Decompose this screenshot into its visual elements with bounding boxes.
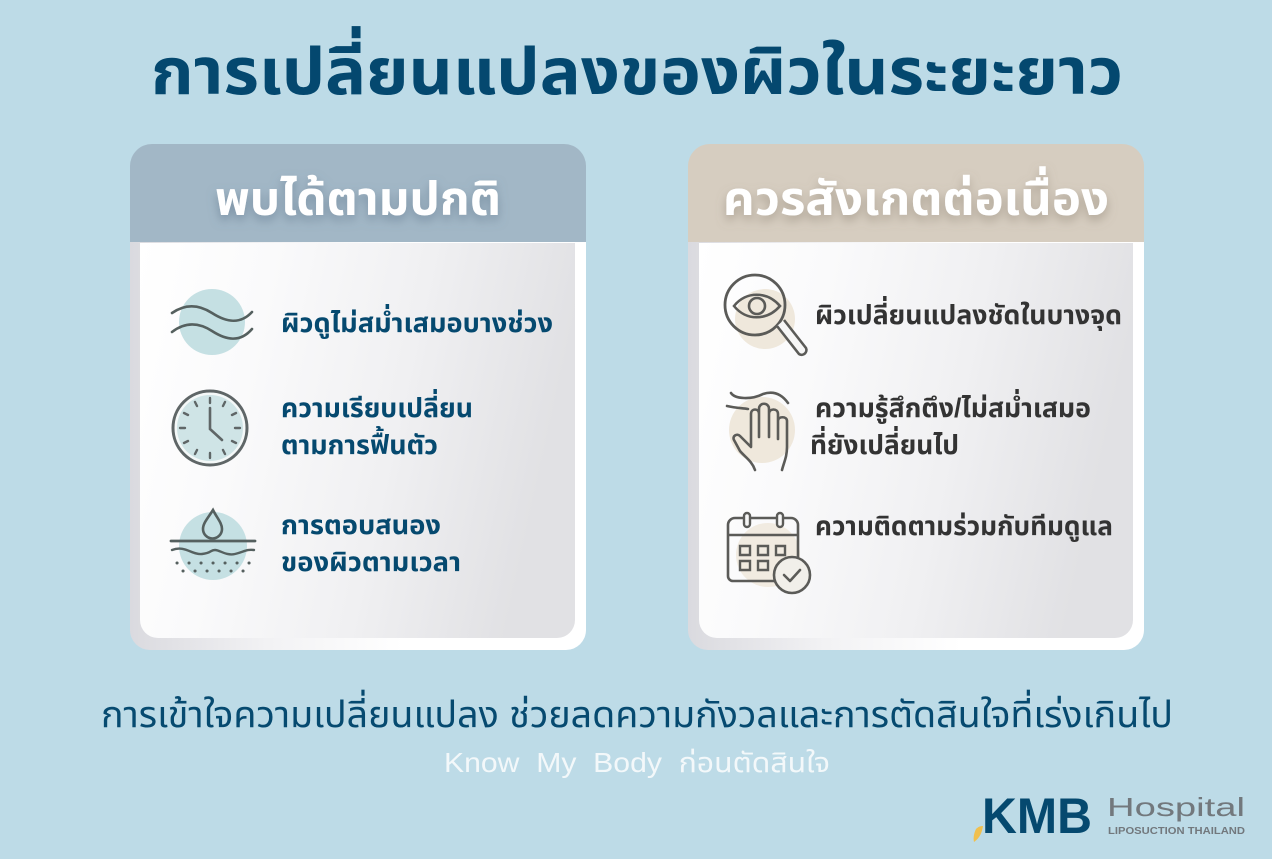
text: skin response: ของผิวตามเวลา	[281, 547, 461, 577]
summary sentence: การเข้าใจความเปลี่ยนแปลง ช่วยลดความกังวลและการตัดสินใจที่เร่งเกินไป	[101, 689, 1173, 735]
text: tightness	[810, 389, 1091, 460]
panel header: keep watching	[688, 144, 1144, 242]
text: smoothness: ตามการฟื้นตัว	[281, 426, 438, 460]
panel: keep watching	[688, 144, 1144, 650]
text: follow-up: ความติดตามร่วมกับทีมดูแล	[815, 511, 1113, 542]
icon: skin droplet	[171, 510, 255, 580]
panel: normal changes	[130, 144, 586, 650]
panel inner card: normal	[140, 243, 575, 638]
heading: normal: พบได้ตามปกติ	[215, 172, 501, 225]
logo hospital: Hospital	[1107, 792, 1245, 822]
text: smoothness: ความเรียบเปลี่ยน	[281, 389, 473, 423]
text: uneven skin: ผิวดูไม่สม่ำเสมอบางช่วง	[281, 304, 553, 339]
text: tightness: ที่ยังเปลี่ยนไป	[810, 426, 959, 460]
icon: hand on skin	[727, 393, 795, 470]
text: skin response	[281, 510, 461, 577]
logo: KMB Hospital	[974, 788, 1245, 844]
logo wordmark: KMB	[982, 788, 1092, 844]
panel inner card: keep watching	[699, 243, 1133, 638]
logo mark	[974, 826, 983, 842]
icon: waves	[172, 289, 252, 355]
icon: calendar check	[728, 513, 810, 593]
icon: clock	[173, 391, 247, 465]
icon: magnifier eye	[725, 275, 806, 355]
heading: keep watching: ควรสังเกตต่อเนื่อง	[723, 166, 1109, 225]
title: การเปลี่ยนแปลงของผิวในระยะยาว	[151, 26, 1123, 108]
text: visible change: ผิวเปลี่ยนแปลงชัดในบางจุด	[815, 296, 1122, 331]
text: smoothness	[281, 389, 473, 460]
text: tightness: ความรู้สึกตึง/ไม่สม่ำเสมอ	[815, 389, 1091, 424]
logo subtitle: LIPOSUCTION THAILAND	[1108, 825, 1245, 837]
tagline: Know My Body ก่อนตัดสินใจ	[444, 747, 830, 778]
panel header: normal	[130, 144, 586, 242]
text: skin response: การตอบสนอง	[281, 510, 441, 540]
